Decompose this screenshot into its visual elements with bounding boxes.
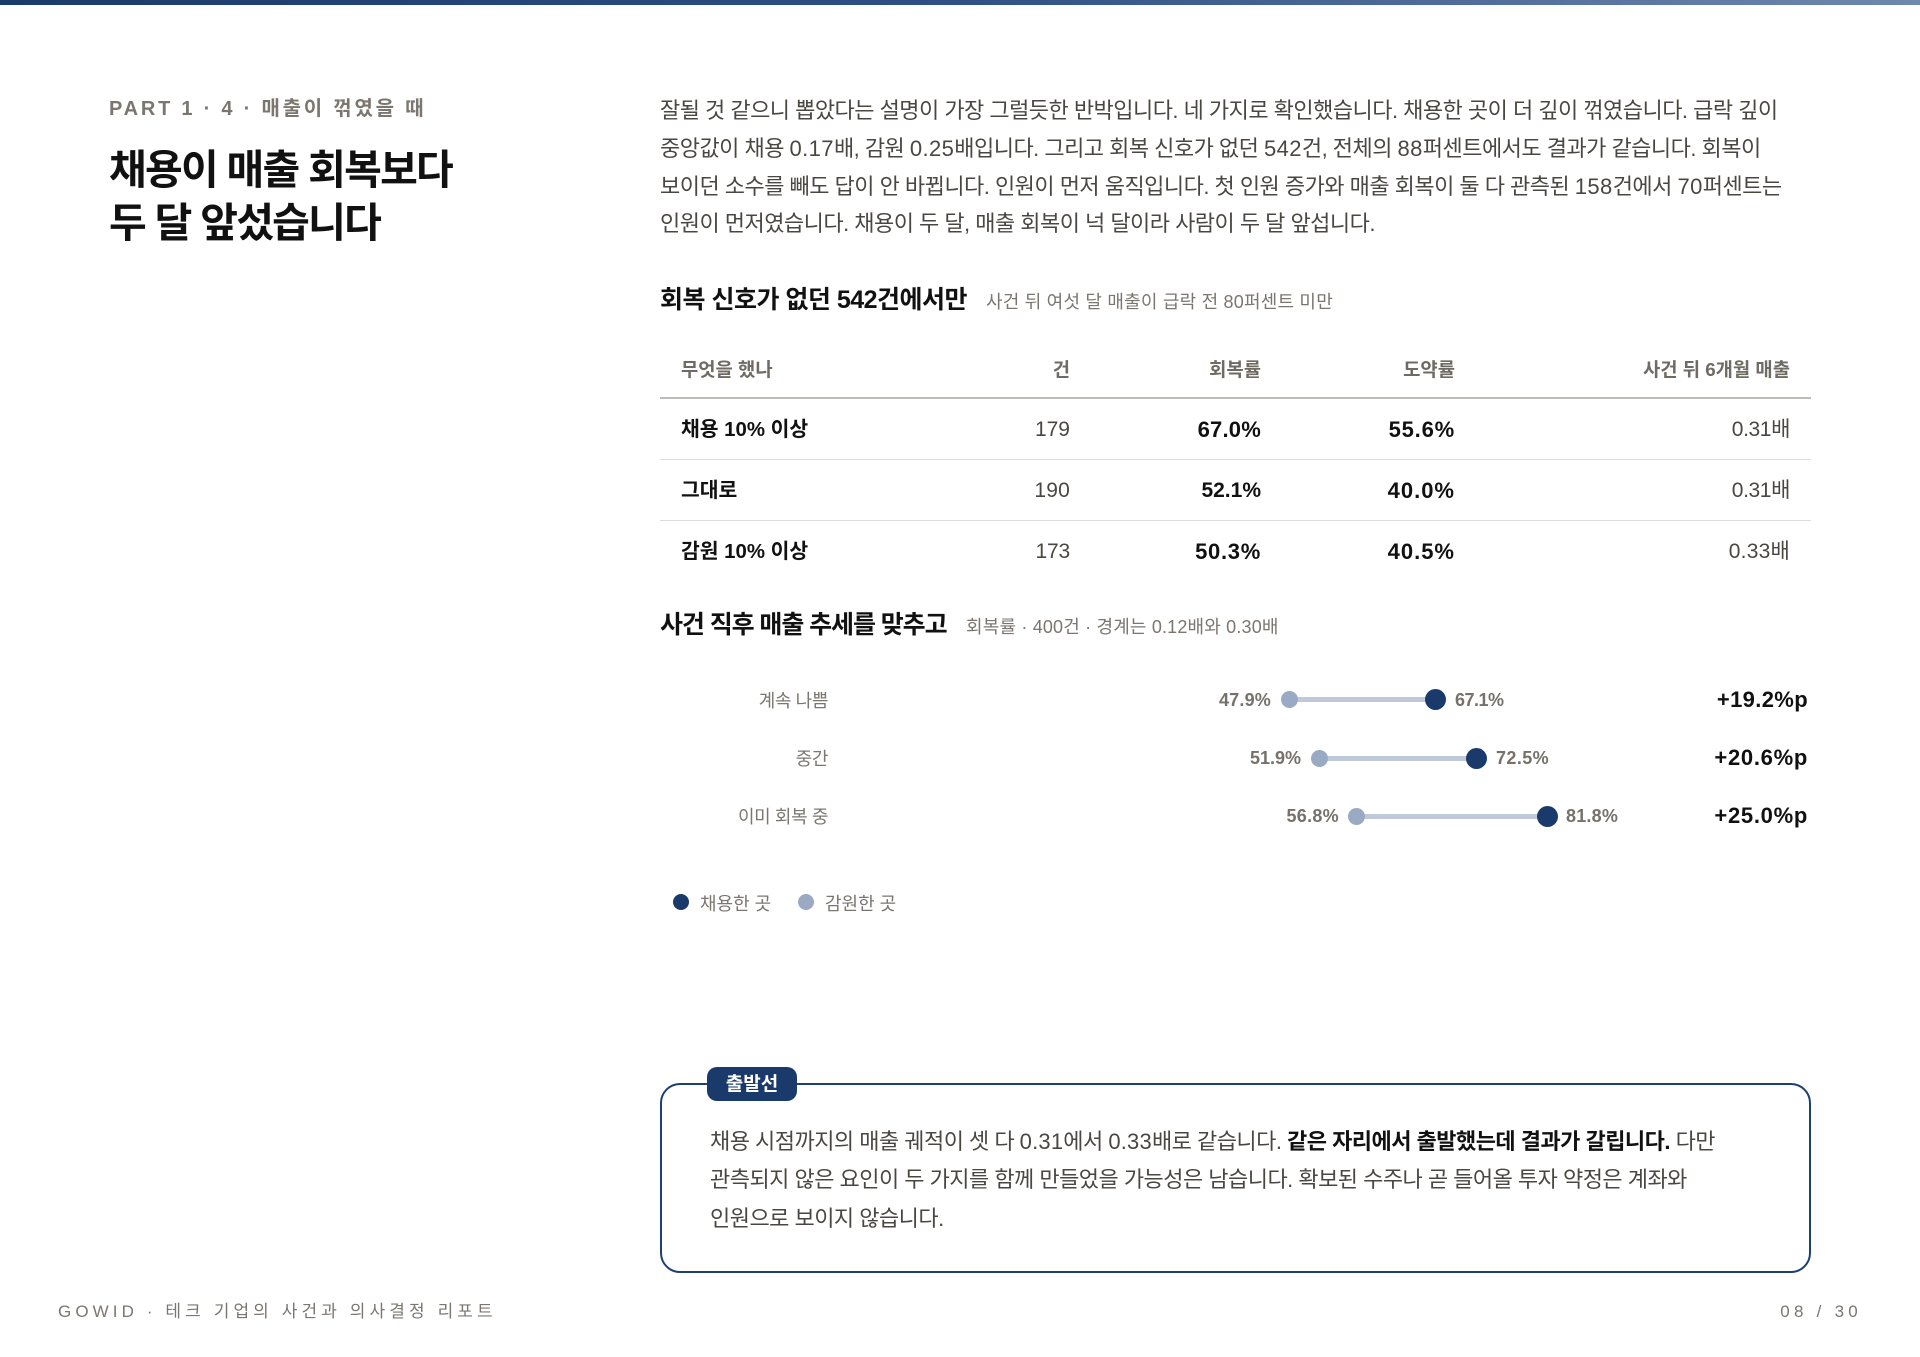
- table row: 그대로: 190: [1034, 478, 1070, 502]
- chart row: 중간: 중간: [796, 748, 828, 768]
- chart row: 계속 나쁨: 계속 나쁨: [759, 690, 828, 710]
- chart row: 중간: 51.9%: [1250, 748, 1301, 768]
- top gradient bar: [0, 0, 1920, 5]
- table row: 감원 10% 이상: 0.33배: [1729, 540, 1790, 562]
- body paragraph: 인원이 먼저였습니다. 채용이 두 달, 매출 회복이 넉 달이라 사람이 두 달 앞섭니다.: [660, 210, 1375, 236]
- table header row: [681, 358, 1790, 380]
- callout text: [710, 1129, 1715, 1231]
- table header row: 회복률: [1209, 358, 1261, 380]
- chart row: 중간: 72.5%: [1496, 748, 1549, 768]
- callout text: 채용 시점까지의 매출 궤적이 셋 다 0.31에서 0.33배로 같습니다. 같은 자리에서 출발했는데 결과가 갈립니다. 다만: [710, 1129, 1715, 1154]
- table row: 그대로: [681, 478, 1790, 502]
- title: 채용이 매출 회복보다: [109, 147, 452, 193]
- table row: 감원 10% 이상: [681, 538, 1790, 564]
- table row: 감원 10% 이상: 50.3%: [1195, 538, 1261, 564]
- table row: 채용 10% 이상: 채용 10% 이상: [681, 418, 808, 440]
- chart row: 중간: [796, 745, 1808, 770]
- table row: 채용 10% 이상: 55.6%: [1389, 416, 1455, 442]
- section subheading: table: 사건 뒤 여섯 달 매출이 급락 전 80퍼센트 미만: [986, 292, 1333, 312]
- callout tag: [707, 1067, 797, 1101]
- chart row: 중간: +20.6%p: [1714, 745, 1808, 770]
- body paragraph: [660, 98, 1782, 236]
- callout box: [660, 1083, 1811, 1273]
- table header row: 무엇을 했나: [681, 358, 773, 380]
- chart row: 이미 회복 중: 81.8%: [1566, 806, 1618, 826]
- callout text: 관측되지 않은 요인이 두 가지를 함께 만들었을 가능성은 남습니다. 확보된 수주나 곧 들어올 투자 약정은 계좌와: [710, 1167, 1687, 1192]
- table row: 그대로: 52.1%: [1201, 478, 1261, 502]
- dumbbell chart: [738, 687, 1808, 828]
- legend: 감원한 곳: [825, 894, 896, 914]
- section heading: table: 회복 신호가 없던 542건에서만: [660, 286, 967, 314]
- chart row: 계속 나쁨: [759, 687, 1808, 712]
- footer left: GOWID · 테크 기업의 사건과 의사결정 리포트: [58, 1302, 497, 1321]
- legend: [673, 894, 896, 914]
- eyebrow label: PART 1 · 4 · 매출이 꺾였을 때: [109, 98, 426, 120]
- table row: 감원 10% 이상: 173: [1036, 540, 1070, 562]
- body paragraph: 잘될 것 같으니 뽑았다는 설명이 가장 그럴듯한 반박입니다. 네 가지로 확인했습니다. 채용한 곳이 더 깊이 꺾였습니다. 급락 깊이: [660, 98, 1778, 122]
- chart row: 계속 나쁨: 47.9%: [1219, 690, 1271, 710]
- table row: 그대로: 0.31배: [1732, 478, 1790, 502]
- table row: 채용 10% 이상: 0.31배: [1732, 418, 1790, 440]
- body paragraph: 보이던 소수를 빼도 답이 안 바뀝니다. 인원이 먼저 움직입니다. 첫 인원 증가와 매출 회복이 둘 다 관측된 158건에서 70퍼센트는: [660, 174, 1782, 198]
- callout text: 인원으로 보이지 않습니다.: [710, 1206, 944, 1231]
- chart row: 계속 나쁨: 67.1%: [1455, 690, 1504, 710]
- chart row: 계속 나쁨: +19.2%p: [1717, 687, 1808, 712]
- legend: 채용한 곳: [700, 894, 771, 914]
- section heading: dumbbell chart: 사건 직후 매출 추세를 맞추고: [660, 611, 947, 639]
- callout tag: 출발선: [726, 1074, 778, 1095]
- chart row: 이미 회복 중: 56.8%: [1286, 806, 1339, 826]
- table header row: 도약률: [1403, 358, 1455, 380]
- table: [660, 358, 1811, 564]
- table row: 그대로: 40.0%: [1388, 478, 1455, 502]
- chart row: 이미 회복 중: 이미 회복 중: [738, 806, 828, 826]
- title: 두 달 앞섰습니다: [109, 200, 380, 246]
- table row: 그대로: 그대로: [681, 480, 737, 502]
- body paragraph: 중앙값이 채용 0.17배, 감원 0.25배입니다. 그리고 회복 신호가 없던 542건, 전체의 88퍼센트에서도 결과가 같습니다. 회복이: [660, 136, 1761, 160]
- footer page number: 08 / 30: [1780, 1302, 1862, 1321]
- table header row: 건: [1053, 358, 1070, 380]
- table row: 감원 10% 이상: 40.5%: [1388, 538, 1455, 564]
- table row: 채용 10% 이상: 67.0%: [1198, 416, 1261, 442]
- table row: 채용 10% 이상: 179: [1035, 418, 1070, 440]
- section subheading: dumbbell chart: 회복률 · 400건 · 경계는 0.12배와 0.30배: [966, 617, 1279, 637]
- table row: 채용 10% 이상: [681, 416, 1790, 442]
- title: [109, 147, 453, 246]
- table row: 감원 10% 이상: 감원 10% 이상: [681, 540, 808, 562]
- chart row: 이미 회복 중: +25.0%p: [1714, 803, 1808, 828]
- chart row: 이미 회복 중: [738, 803, 1808, 828]
- table header row: 사건 뒤 6개월 매출: [1643, 358, 1790, 380]
